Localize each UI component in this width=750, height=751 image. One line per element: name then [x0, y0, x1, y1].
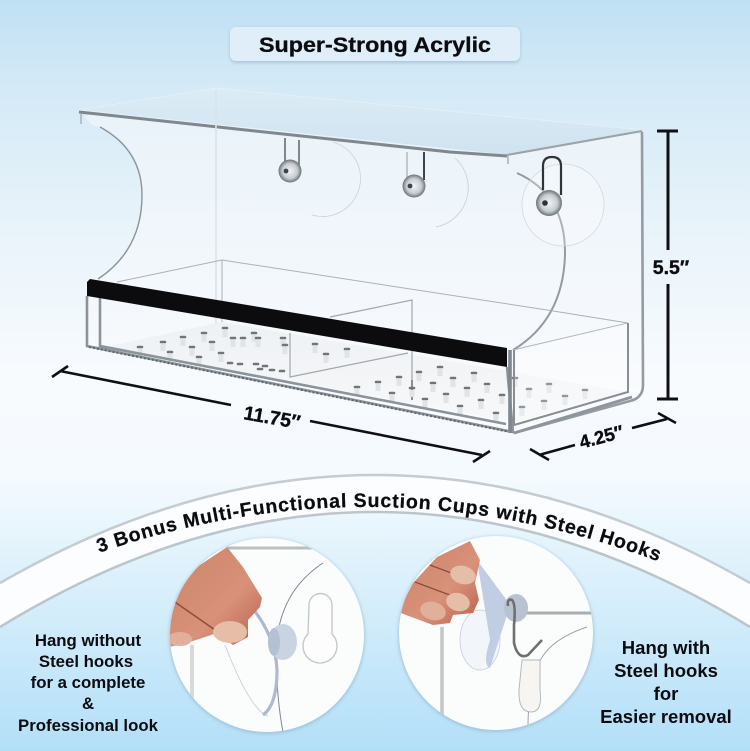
- title pill: [230, 27, 520, 63]
- right caption: Hang with: [622, 637, 710, 658]
- suction cups with bolts: [278, 138, 604, 246]
- dimension: length 11.75 inches: [52, 366, 490, 462]
- suction cup and knob: [254, 611, 279, 716]
- right caption: Easier removal: [600, 706, 732, 727]
- right caption: [600, 637, 732, 727]
- dimension: height 5.5 inches: [653, 131, 689, 399]
- left caption: Steel hooks: [39, 652, 133, 671]
- dimension: length 11.75 inches: 11.75″: [242, 402, 302, 434]
- keyhole slot: [303, 594, 337, 663]
- keyhole slot: [519, 660, 541, 712]
- curved banner: [0, 474, 750, 628]
- floor pegs: [140, 330, 585, 422]
- curved banner: 3 Bonus Multi-Functional Suction Cups with Steel Hooks: [96, 493, 660, 560]
- hand: [398, 541, 480, 625]
- left caption: for a complete: [31, 673, 145, 692]
- left photo: cup without hook: [165, 538, 365, 734]
- dimension: depth 4.25 inches: 4.25″: [577, 421, 626, 453]
- dimension: height 5.5 inches: 5.5″: [653, 257, 689, 279]
- right edge: [514, 132, 643, 433]
- right photo: cup with steel hook: [398, 536, 594, 732]
- suction cup: [460, 610, 500, 670]
- dimension: depth 4.25 inches: [530, 413, 676, 460]
- tray front and right walls: [87, 296, 513, 432]
- tray floor tint: [105, 322, 628, 422]
- back and side panels: [84, 92, 643, 433]
- tray back lines: [117, 260, 628, 350]
- black perch bar: [87, 279, 507, 367]
- title pill: Super-Strong Acrylic: [259, 33, 491, 57]
- tray divider: [290, 300, 412, 400]
- side panel cut-out arcs: [98, 127, 142, 279]
- knob and steel hook: [504, 594, 528, 622]
- top shelf: [79, 88, 642, 155]
- left caption: Hang without: [35, 631, 142, 650]
- hand: [165, 547, 262, 648]
- left caption: &: [82, 694, 94, 713]
- acrylic feeder: [79, 88, 643, 433]
- left caption: [18, 631, 159, 735]
- left caption: Professional look: [18, 716, 159, 735]
- right caption: for: [654, 683, 678, 704]
- right caption: Steel hooks: [614, 660, 718, 681]
